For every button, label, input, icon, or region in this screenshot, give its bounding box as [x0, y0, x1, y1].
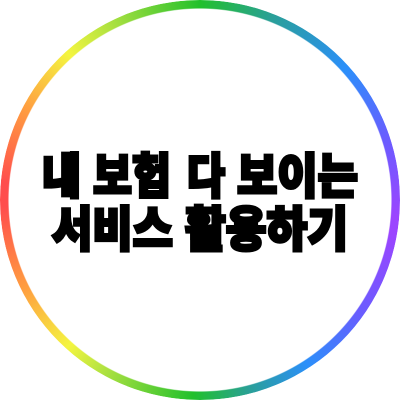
title: 보이는: [237, 151, 358, 204]
title: 보험: [93, 151, 171, 204]
title: 활용하기: [185, 204, 348, 257]
title: 서비스: [52, 204, 173, 257]
title: 다: [187, 151, 225, 204]
title: 내: [42, 151, 81, 204]
